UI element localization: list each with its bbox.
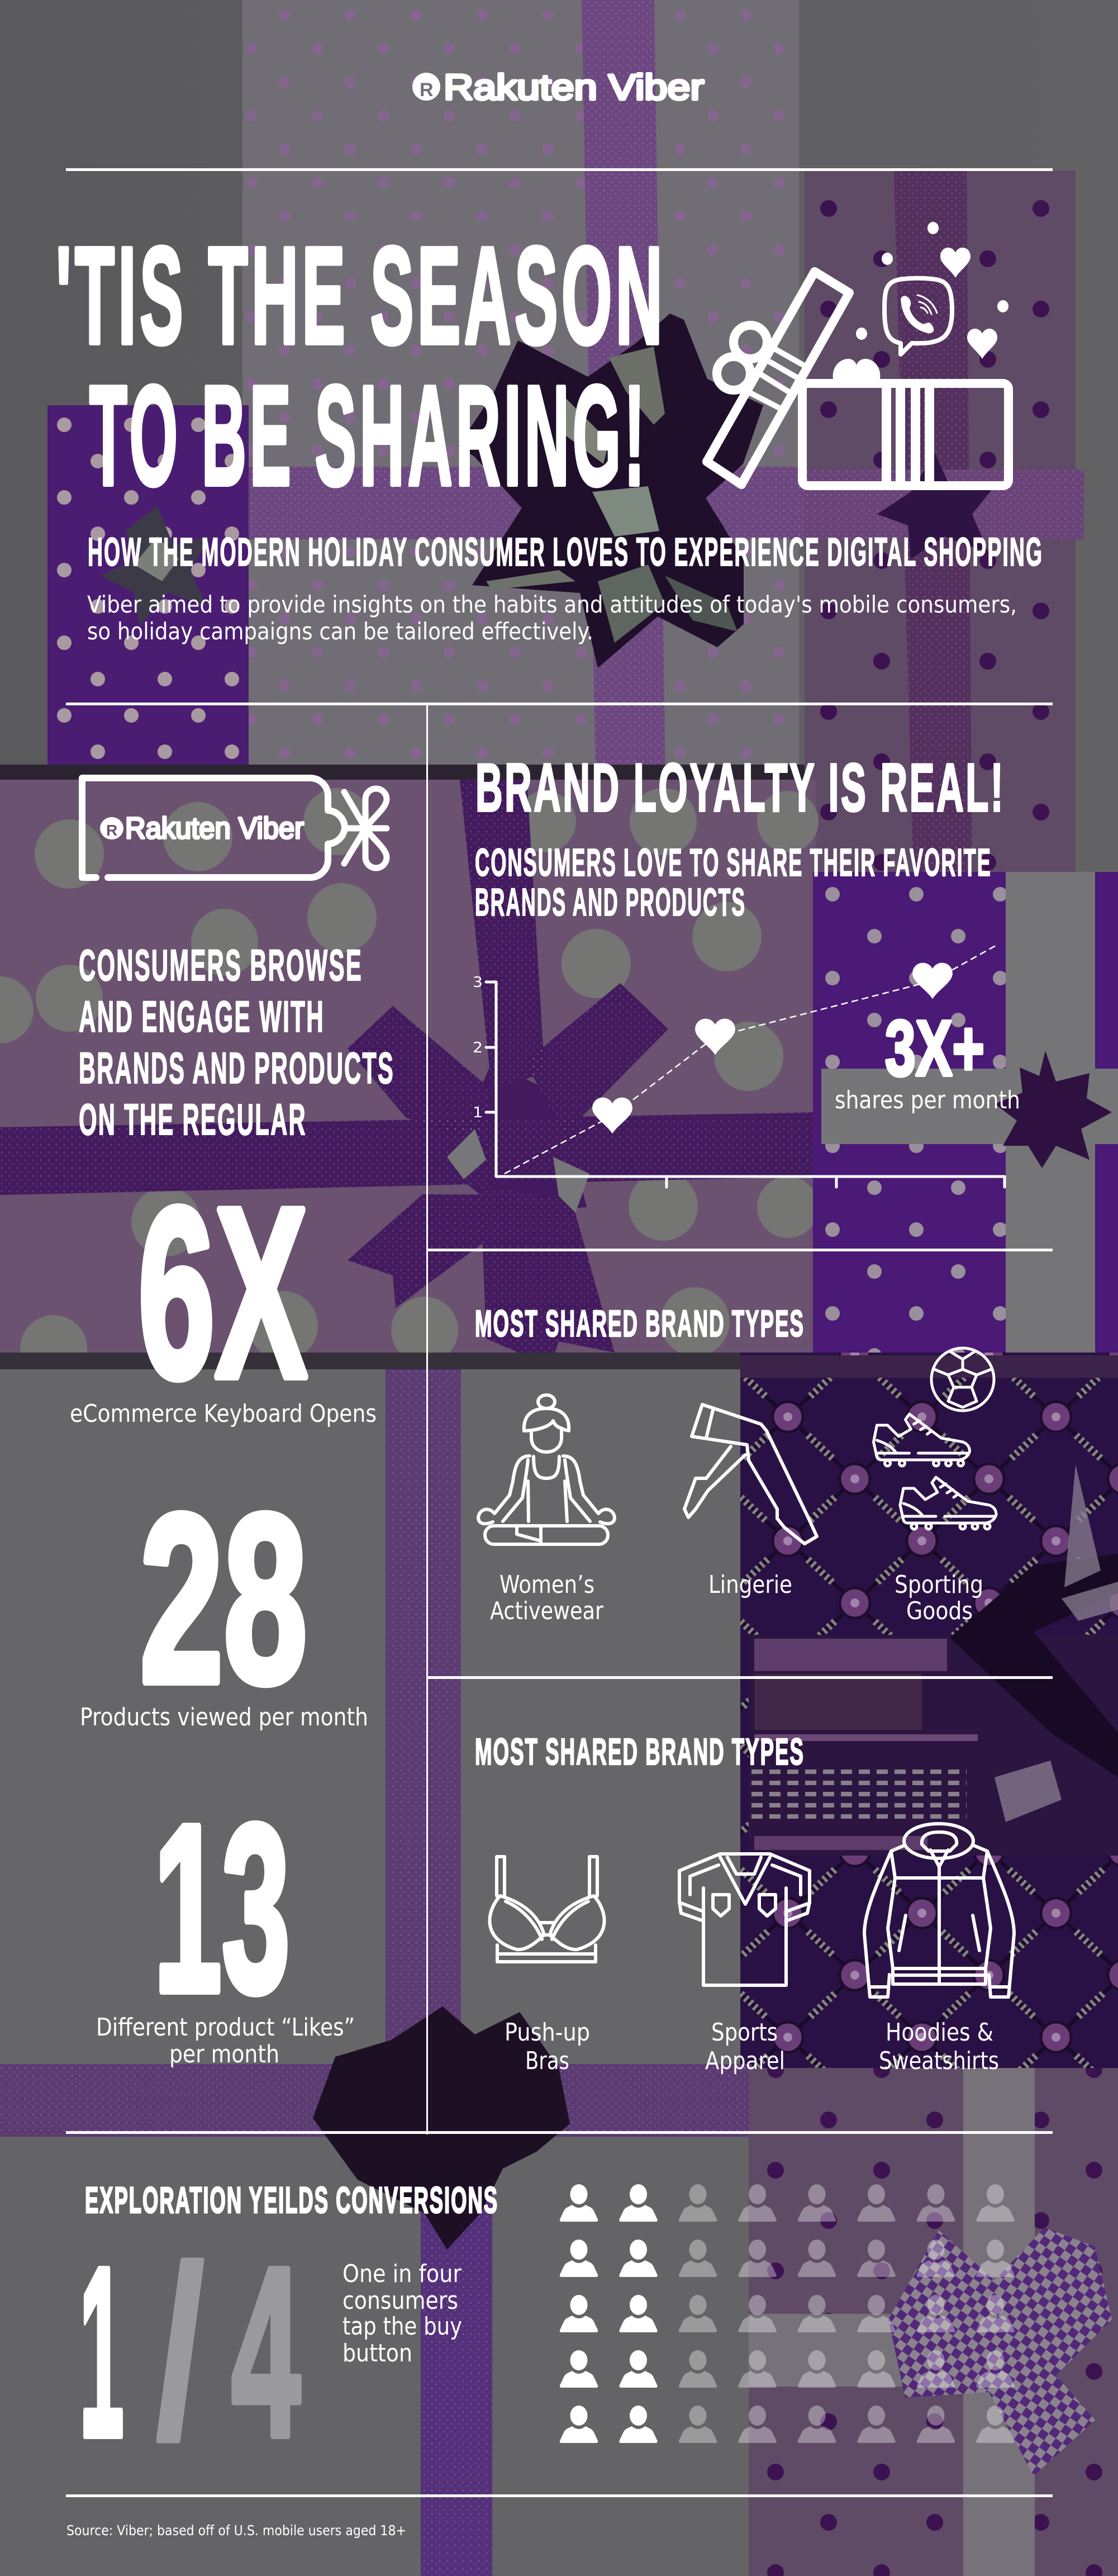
text: one in four consumers: button	[342, 2339, 412, 2368]
label: Push-up Bras	[505, 2018, 590, 2075]
gray box	[0, 1353, 1118, 1372]
stat: one quarter: 1	[79, 2217, 124, 2487]
icon: open gift box with Viber hearts	[707, 222, 1008, 486]
panel: exploration yields conversions	[79, 2179, 1015, 2487]
line chart with hearts: 2	[473, 1040, 483, 1056]
stat: 28: Products viewed per month	[80, 1703, 368, 1731]
icon: legs in stockings	[684, 1405, 817, 1544]
heading: consumers browse: ON THE REGULAR	[79, 1094, 307, 1144]
icon: football boot two	[900, 1477, 996, 1529]
icon: gift tag with logo: Rakuten Viber	[125, 812, 304, 845]
divider lines	[66, 168, 1053, 2497]
panel: most shared brand types, first row	[475, 1303, 996, 1625]
icon grid: people, first two columns highlighted	[560, 2184, 1015, 2443]
text: one in four consumers: One in four	[342, 2260, 462, 2288]
intro text: so holiday campaigns can be tailored effectively.	[87, 618, 593, 645]
source note: Source: Viber; based off of U.S. mobile users aged 18+	[66, 2522, 406, 2539]
logo: Rakuten Viber: Rakuten Viber	[444, 67, 704, 107]
line chart with hearts: 1	[473, 1104, 483, 1121]
panel: most shared brand types, second row	[475, 1731, 1014, 2075]
stat: 6X	[70, 1157, 377, 1428]
label: Sporting Goods: Sporting	[895, 1571, 983, 1599]
heading: consumers browse	[79, 940, 394, 1144]
heading: consumers browse: CONSUMERS BROWSE	[79, 940, 363, 990]
stat: one quarter: 4	[231, 2217, 301, 2487]
icon: football boot one	[874, 1414, 970, 1466]
subheading: BRANDS AND PRODUCTS	[475, 880, 746, 924]
stat: 13	[96, 1775, 355, 2069]
stat: one quarter	[79, 2217, 301, 2487]
label: Hoodies and Sweatshirts	[879, 2018, 999, 2075]
stat: 3X+: shares per month	[835, 1086, 1020, 1114]
stat: 3X+: 3X+	[885, 1004, 984, 1092]
text: one in four consumers: consumers	[342, 2286, 458, 2315]
icon: gift tag with logo: R	[106, 822, 117, 839]
icon: soccer ball	[931, 1348, 994, 1411]
right purple box	[813, 872, 1118, 1364]
stat: 13: 13	[154, 1775, 290, 2042]
icon: hooded jacket	[864, 1824, 1014, 1997]
label: Push-up Bras: Push-up	[505, 2018, 590, 2047]
label: Sports Apparel	[705, 2018, 785, 2075]
label: Sporting Goods: Goods	[906, 1597, 973, 1625]
heading: consumers browse: AND ENGAGE WITH	[79, 992, 325, 1041]
label: Lingerie: Lingerie	[708, 1571, 792, 1599]
stat: 28	[80, 1465, 368, 1733]
icon: sports jersey	[679, 1854, 810, 1985]
label: Sports Apparel: Apparel	[705, 2047, 785, 2075]
intro text	[87, 591, 1017, 645]
label: Women's Activewear	[490, 1571, 604, 1625]
panel: brand loyalty	[473, 749, 1020, 1187]
heading: MOST SHARED BRAND TYPES	[475, 1303, 805, 1345]
label: Sporting Goods	[895, 1571, 983, 1625]
heading: EXPLORATION YEILDS CONVERSIONS	[85, 2179, 498, 2221]
photo bows	[458, 314, 763, 668]
icon: gift tag with logo	[82, 778, 387, 877]
text: one in four consumers	[342, 2260, 462, 2368]
label: Push-up Bras: Bras	[525, 2047, 569, 2075]
title	[56, 219, 666, 515]
stat: 6X: 6X	[138, 1157, 308, 1428]
label: Hoodies and Sweatshirts: Sweatshirts	[879, 2047, 999, 2075]
stat: one quarter: /	[156, 2217, 204, 2487]
stat: 13: per month	[169, 2040, 279, 2069]
stat: 28: 28	[140, 1465, 307, 1733]
subheading	[475, 841, 992, 924]
line chart with hearts	[473, 946, 1005, 1187]
heading: MOST SHARED BRAND TYPES	[475, 1731, 805, 1773]
text: one in four consumers: tap the buy	[342, 2312, 462, 2341]
label: Women's Activewear: Women’s	[499, 1571, 594, 1599]
panel: left column stats	[70, 778, 394, 2069]
label: Sports Apparel: Sports	[711, 2018, 778, 2047]
icon: yoga woman	[478, 1395, 615, 1544]
intro text: Viber aimed to provide insights on the habits and attitudes of today's mobile consumers,	[87, 591, 1017, 618]
logo: Rakuten Viber: R	[420, 79, 434, 101]
label: Hoodies and Sweatshirts: Hoodies &	[886, 2018, 993, 2047]
stat: 13: Different product “Likes”	[96, 2013, 355, 2042]
stat: 6X: eCommerce Keyboard Opens	[70, 1400, 377, 1428]
stat: 3X+	[835, 1004, 1020, 1114]
polka dot box	[0, 780, 816, 1361]
line chart with hearts: 3	[473, 974, 483, 991]
icon: bra	[489, 1857, 605, 1962]
heading: consumers browse: BRANDS AND PRODUCTS	[79, 1043, 394, 1093]
label: Women's Activewear: Activewear	[490, 1597, 604, 1625]
